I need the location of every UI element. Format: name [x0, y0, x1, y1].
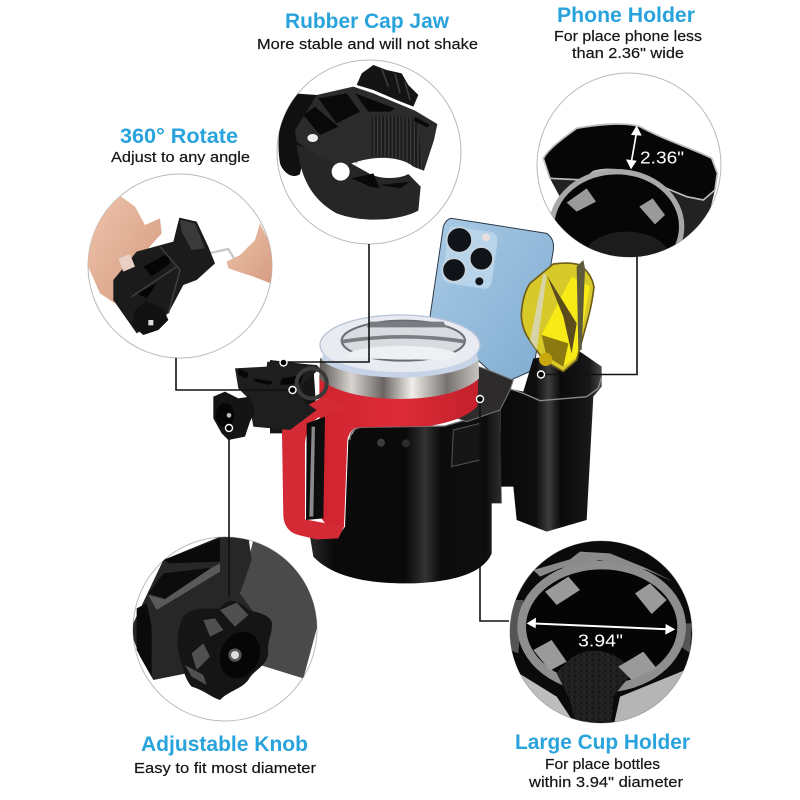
label: 2.36 inch: 2.36" — [640, 147, 684, 167]
knob on product — [213, 392, 255, 440]
callout line: phone holder — [538, 256, 637, 378]
mug handle — [282, 397, 352, 539]
mug lid — [320, 315, 480, 377]
icon: right hand — [227, 223, 275, 285]
subtext: phone holder: than 2.36" wide — [572, 45, 684, 62]
large cup body — [310, 410, 502, 583]
arrow: cup holder diameter — [532, 623, 670, 629]
product: cup holder with mug, phone and sunglasses — [213, 218, 602, 583]
mug steel band — [319, 358, 479, 399]
icon: clamp knob — [357, 65, 418, 107]
panel: 360 rotate photo circle — [87, 174, 275, 358]
subtext: large cup holder: For place bottles — [545, 756, 660, 773]
heading: rubber cap jaw: Rubber Cap Jaw — [285, 10, 450, 33]
icon: knob body — [177, 601, 272, 700]
left clamp assembly — [213, 362, 327, 440]
callout line: rubber cap jaw — [280, 244, 369, 366]
mug red body — [319, 377, 478, 538]
heading: phone holder: Phone Holder — [557, 4, 695, 27]
panel: rubber cap jaw photo circle — [277, 60, 461, 244]
label: 3.94 inch: 3.94" — [578, 631, 623, 651]
icon: left hand — [87, 193, 162, 303]
callout line: adjustable knob — [226, 424, 232, 597]
small phone cup — [500, 352, 602, 532]
phone — [430, 218, 554, 383]
icon: clamp in hand — [113, 218, 215, 333]
panel: adjustable knob photo circle — [130, 537, 320, 721]
sunglasses — [521, 260, 594, 372]
panel: phone holder photo circle — [536, 72, 722, 258]
icon: fingernail — [118, 254, 135, 272]
subtext: 360 rotate: Adjust to any angle — [111, 149, 250, 166]
arrow: phone slot width — [631, 132, 637, 164]
callout line: large cup holder — [476, 396, 509, 621]
subtext: rubber cap jaw: More stable and will not shake — [257, 36, 478, 53]
subtext: large cup holder: within 3.94" diameter — [528, 774, 683, 791]
holder rim — [453, 367, 513, 422]
panel: large cup holder photo circle — [510, 540, 692, 724]
heading: adjustable knob: Adjustable Knob — [141, 733, 308, 756]
subtext: adjustable knob: Easy to fit most diameter — [134, 760, 316, 777]
heading: large cup holder: Large Cup Holder — [515, 731, 690, 754]
icon: small knob — [132, 302, 168, 335]
mounting clamp — [270, 360, 317, 433]
icon: hex key — [208, 249, 234, 258]
subtext: phone holder: For place phone less — [554, 28, 702, 45]
callout line: 360 rotate — [176, 358, 296, 394]
heading: 360 rotate: 360° Rotate — [120, 125, 238, 148]
